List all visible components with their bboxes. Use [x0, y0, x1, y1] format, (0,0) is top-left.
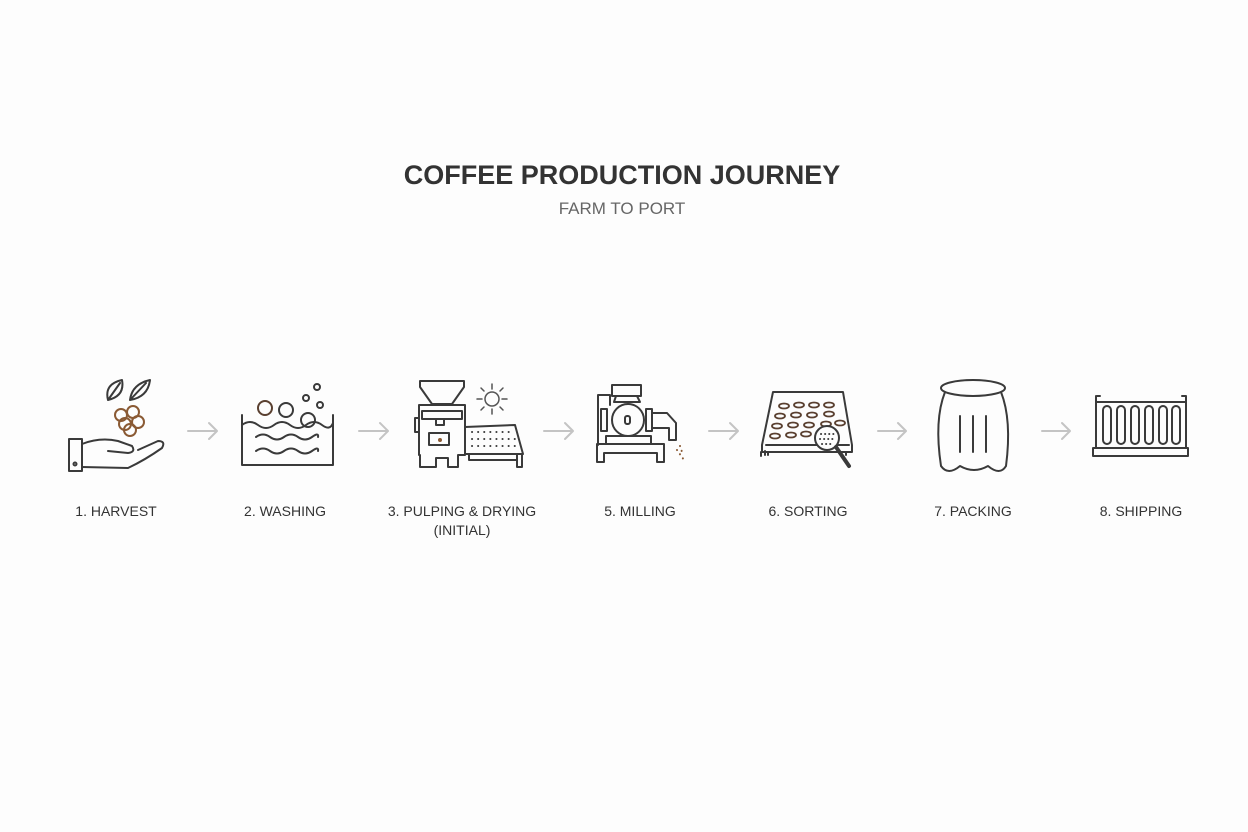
label: packing: 7. PACKING [934, 503, 1012, 519]
label: washing: 2. WASHING [244, 503, 326, 519]
icon: washing [242, 384, 333, 465]
icon: packing [938, 380, 1008, 471]
label: pulping & drying: (INITIAL) [434, 522, 490, 538]
arrow 1 [188, 423, 217, 439]
arrow 3 [544, 423, 573, 439]
arrow 4 [709, 423, 738, 439]
arrow 6 [1042, 423, 1070, 439]
icon: milling [597, 385, 684, 462]
icon: shipping [1093, 396, 1188, 456]
icon: sorting [761, 392, 852, 466]
label: sorting: 6. SORTING [768, 503, 848, 519]
arrow 2 [359, 423, 388, 439]
label: harvest: 1. HARVEST [75, 503, 157, 519]
arrow 5 [878, 423, 906, 439]
title: COFFEE PRODUCTION JOURNEY [404, 160, 840, 190]
icon: pulping & drying [415, 381, 523, 467]
label: pulping & drying: 3. PULPING & DRYING [388, 503, 536, 519]
icon: harvest [69, 380, 163, 471]
label: milling: 5. MILLING [604, 503, 676, 519]
label: shipping: 8. SHIPPING [1100, 503, 1182, 519]
subtitle: FARM TO PORT [559, 199, 685, 218]
